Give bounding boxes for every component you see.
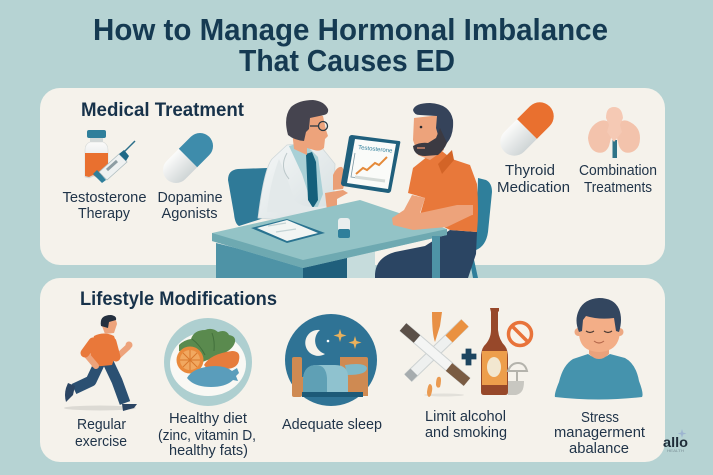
plus sign — [462, 349, 476, 365]
label: stress management: managerment — [554, 425, 645, 441]
label: thyroid medication: Medication — [497, 180, 570, 196]
logo: allo health: allo — [663, 434, 688, 450]
clipboard on desk — [251, 219, 325, 243]
label: stress management — [554, 410, 645, 457]
logo: allo health: HEALTH — [667, 449, 685, 453]
icon: adequate sleep — [285, 314, 377, 406]
label: thyroid medication — [497, 163, 570, 196]
label: dopamine agonists: Dopamine — [158, 190, 222, 206]
label: combination treatments — [579, 163, 657, 196]
label: limit alcohol and smoking: Limit alcohol — [425, 409, 506, 425]
left chair — [228, 168, 267, 226]
icon: thyroid gland — [588, 107, 640, 158]
title — [93, 12, 608, 78]
label: dopamine agonists: Agonists — [162, 206, 218, 222]
heading: lifestyle modifications: Lifestyle Modifications — [80, 289, 277, 310]
no symbol — [508, 322, 532, 346]
label: stress management: abalance — [569, 441, 629, 457]
label: testosterone therapy: Therapy — [78, 206, 131, 222]
label: regular exercise — [75, 417, 127, 450]
heading: medical treatment: Medical Treatment — [81, 100, 245, 121]
panel: medical treatment background — [40, 88, 665, 265]
label: healthy diet: Healthy diet — [169, 411, 247, 427]
label: stress management: Stress — [581, 410, 619, 426]
label: healthy diet — [158, 411, 256, 459]
illustration: doctor consulting patient at desk — [212, 100, 492, 278]
label: regular exercise: Regular — [77, 417, 126, 433]
title: How to Manage Hormonal Imbalance — [93, 12, 608, 47]
desk — [216, 243, 304, 278]
icon: limit alcohol and smoking — [403, 308, 532, 397]
icon: dopamine capsule — [158, 128, 218, 188]
icon: thyroid medication capsule — [494, 96, 560, 162]
beer bottle — [481, 308, 508, 395]
small glass — [508, 363, 527, 371]
tablet with testosterone chart — [341, 135, 400, 193]
logo: allo health — [663, 429, 688, 453]
icon: calm person — [555, 298, 643, 400]
label: regular exercise: exercise — [75, 434, 127, 450]
title: That Causes ED — [239, 43, 455, 78]
crossed cigarettes — [408, 323, 465, 378]
label: healthy diet: (zinc, vitamin D, — [158, 428, 256, 444]
label: healthy diet: healthy fats) — [169, 443, 248, 459]
label: combination treatments: Treatments — [584, 180, 652, 196]
label: testosterone therapy: Testosterone — [62, 190, 146, 206]
medicine bottle on desk — [338, 218, 350, 238]
tablet with testosterone chart: Testosterone — [358, 145, 393, 155]
label: limit alcohol and smoking: and smoking — [425, 425, 507, 441]
patient legs — [375, 230, 477, 278]
desk leg — [432, 236, 440, 278]
label: thyroid medication: Thyroid — [505, 163, 555, 179]
panel: lifestyle modifications background — [40, 278, 665, 462]
label: adequate sleep: Adequate sleep — [282, 417, 382, 433]
icon: healthy diet plate — [164, 318, 252, 406]
label: limit alcohol and smoking — [425, 409, 507, 441]
label: combination treatments: Combination — [579, 163, 657, 179]
doctor — [258, 100, 348, 224]
icon: runner — [64, 315, 137, 411]
patient — [392, 103, 478, 232]
label: dopamine agonists — [158, 190, 222, 222]
right chair — [450, 178, 492, 256]
label: testosterone therapy — [62, 190, 146, 222]
icon: testosterone vial and syringe — [85, 130, 135, 183]
